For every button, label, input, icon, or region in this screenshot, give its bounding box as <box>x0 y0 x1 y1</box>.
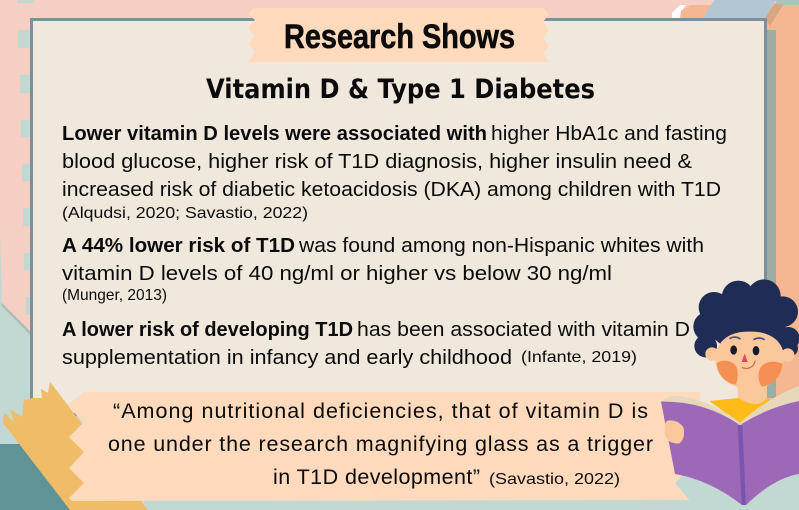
subtitle: Vitamin D & Type 1 Diabetes <box>206 74 595 105</box>
text block: 44% lower risk <box>62 235 704 304</box>
text block: lower vitamin D levels <box>62 123 727 222</box>
decorative dashed squares <box>17 0 34 315</box>
book spine <box>738 425 746 505</box>
text block: lower vitamin D levels: increased risk of diabetic ketoacidosis (DKA) among children with T1D <box>62 179 721 201</box>
text block: lower risk of developing T1D <box>62 319 690 369</box>
eyebrows <box>730 337 764 339</box>
text block: 44% lower risk: was found among non-Hispanic whites with <box>298 235 704 257</box>
text block: lower vitamin D levels: higher HbA1c and fasting <box>491 123 727 145</box>
quote ribbon <box>69 392 700 501</box>
shirt <box>709 398 773 423</box>
text block: 44% lower risk: (Munger, 2013) <box>62 287 167 304</box>
book pages <box>661 386 799 425</box>
main panel <box>32 20 766 414</box>
title: Research Shows <box>284 18 515 56</box>
text block: lower vitamin D levels: Lower vitamin D levels were associated with <box>62 123 487 145</box>
text block: lower risk of developing T1D: supplementation in infancy and early childhood <box>62 347 512 369</box>
hand <box>664 420 684 443</box>
nose <box>742 353 748 362</box>
quote text <box>108 399 653 489</box>
text block: lower risk of developing T1D: (Infante, 2019) <box>521 349 637 366</box>
cheeks <box>717 361 783 387</box>
illustration: child reading a purple book <box>661 279 799 510</box>
text block: lower risk of developing T1D: has been associated with vitamin D <box>357 319 690 341</box>
heading ribbon <box>248 8 549 62</box>
ribbon corner under tape <box>68 392 100 424</box>
smile <box>742 361 755 368</box>
quote text: (Savastio, 2022) <box>489 471 620 488</box>
face <box>715 332 784 389</box>
hair <box>693 279 799 357</box>
text block: 44% lower risk: A 44% lower risk of T1D <box>62 235 295 257</box>
text block: 44% lower risk: vitamin D levels of 40 ng/ml or higher vs below 30 ng/ml <box>62 263 612 285</box>
yellow tape <box>3 382 148 510</box>
quote text: in T1D development” <box>273 465 480 489</box>
quote text: “Among nutritional deficiencies, that of vitamin D is <box>113 399 648 423</box>
mint patch beside book <box>675 470 799 510</box>
book cover <box>661 401 799 505</box>
text block: lower risk of developing T1D: A lower risk of developing T1D <box>62 319 353 341</box>
text block: lower vitamin D levels: (Alqudsi, 2020; Savastio, 2022) <box>62 205 308 222</box>
lower background strip <box>110 501 799 510</box>
neck <box>738 380 767 404</box>
quote text: one under the research magnifying glass as a trigger <box>108 432 653 456</box>
eyes <box>730 345 759 355</box>
text block: lower vitamin D levels: blood glucose, higher risk of T1D diagnosis, higher insulin need & <box>62 151 693 173</box>
ears <box>705 347 794 362</box>
